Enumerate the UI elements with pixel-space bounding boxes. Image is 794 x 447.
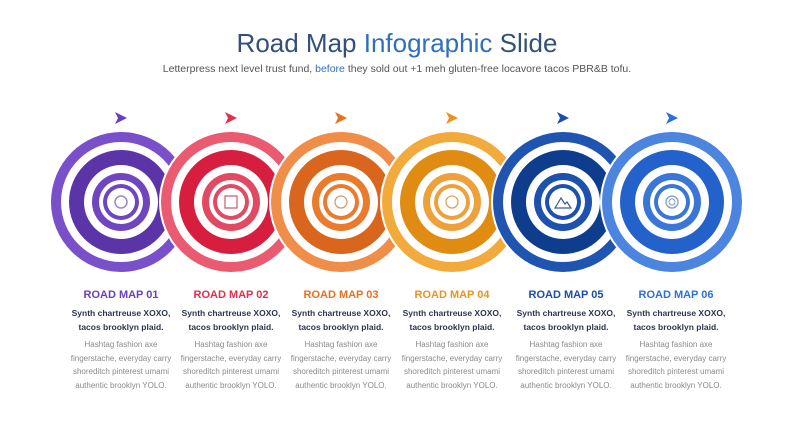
column 1: tacos brooklyn plaid. (78, 322, 164, 332)
column 3: ROAD MAP 03 (304, 289, 378, 301)
column 3: authentic brooklyn YOLO. (295, 380, 387, 390)
circle 3 (269, 112, 413, 274)
column 1: ROAD MAP 01 (84, 289, 158, 301)
column 6: fingerstache, everyday carry (626, 354, 726, 362)
column 2: shoreditch pinterest umami (183, 367, 279, 376)
column 2: Hashtag fashion axe (195, 340, 267, 349)
column 5: Synth chartreuse XOXO, (517, 308, 615, 318)
subtitle: Letterpress next level trust fund, before they sold out +1 meh gluten-free locavore tacos PBR&B tofu. (163, 63, 631, 75)
column 5: Hashtag fashion axe (530, 340, 602, 349)
column 4: Hashtag fashion axe (416, 340, 488, 349)
column 1: authentic brooklyn YOLO. (75, 380, 167, 390)
column 1: fingerstache, everyday carry (71, 354, 171, 362)
column 6: Synth chartreuse XOXO, (627, 308, 725, 318)
column 4 (402, 289, 502, 390)
column 3: fingerstache, everyday carry (291, 354, 391, 362)
column 5: authentic brooklyn YOLO. (520, 380, 612, 390)
column 4: authentic brooklyn YOLO. (406, 380, 498, 390)
column 5: fingerstache, everyday carry (516, 354, 616, 362)
title: Road Map Infographic Slide (237, 28, 557, 58)
column 3: shoreditch pinterest umami (293, 367, 389, 376)
column 6: ROAD MAP 06 (638, 289, 713, 301)
column 1 (70, 289, 172, 390)
column 4: fingerstache, everyday carry (402, 354, 502, 362)
column 5: shoreditch pinterest umami (518, 367, 614, 376)
column 6: shoreditch pinterest umami (628, 367, 724, 376)
column 6: Hashtag fashion axe (640, 340, 712, 349)
column 2: fingerstache, everyday carry (181, 354, 281, 362)
column 5 (516, 289, 616, 390)
column 5: ROAD MAP 05 (528, 289, 603, 301)
column 2: Synth chartreuse XOXO, (182, 308, 280, 318)
column 3: Hashtag fashion axe (305, 340, 377, 349)
circle 4 (380, 112, 524, 274)
column 2: tacos brooklyn plaid. (188, 322, 274, 332)
column 5: tacos brooklyn plaid. (523, 322, 609, 332)
circle 1 (51, 112, 191, 272)
circle 2 (159, 112, 303, 274)
column 2 (180, 289, 282, 390)
column 6: authentic brooklyn YOLO. (630, 380, 722, 390)
column 4: ROAD MAP 04 (414, 289, 489, 301)
column 1: shoreditch pinterest umami (73, 367, 169, 376)
column 1: Hashtag fashion axe (85, 340, 157, 349)
column 4: shoreditch pinterest umami (404, 367, 500, 376)
column 2: authentic brooklyn YOLO. (185, 380, 277, 390)
column 6: tacos brooklyn plaid. (633, 322, 719, 332)
column 1: Synth chartreuse XOXO, (72, 308, 170, 318)
column 4: tacos brooklyn plaid. (409, 322, 495, 332)
column 2: ROAD MAP 02 (194, 289, 268, 301)
column 6 (626, 289, 726, 390)
circle 5 (491, 112, 635, 274)
column 3: Synth chartreuse XOXO, (292, 308, 390, 318)
column 3: tacos brooklyn plaid. (298, 322, 384, 332)
column 3 (290, 289, 392, 390)
column 4: Synth chartreuse XOXO, (403, 308, 501, 318)
circle 6 (600, 112, 744, 274)
